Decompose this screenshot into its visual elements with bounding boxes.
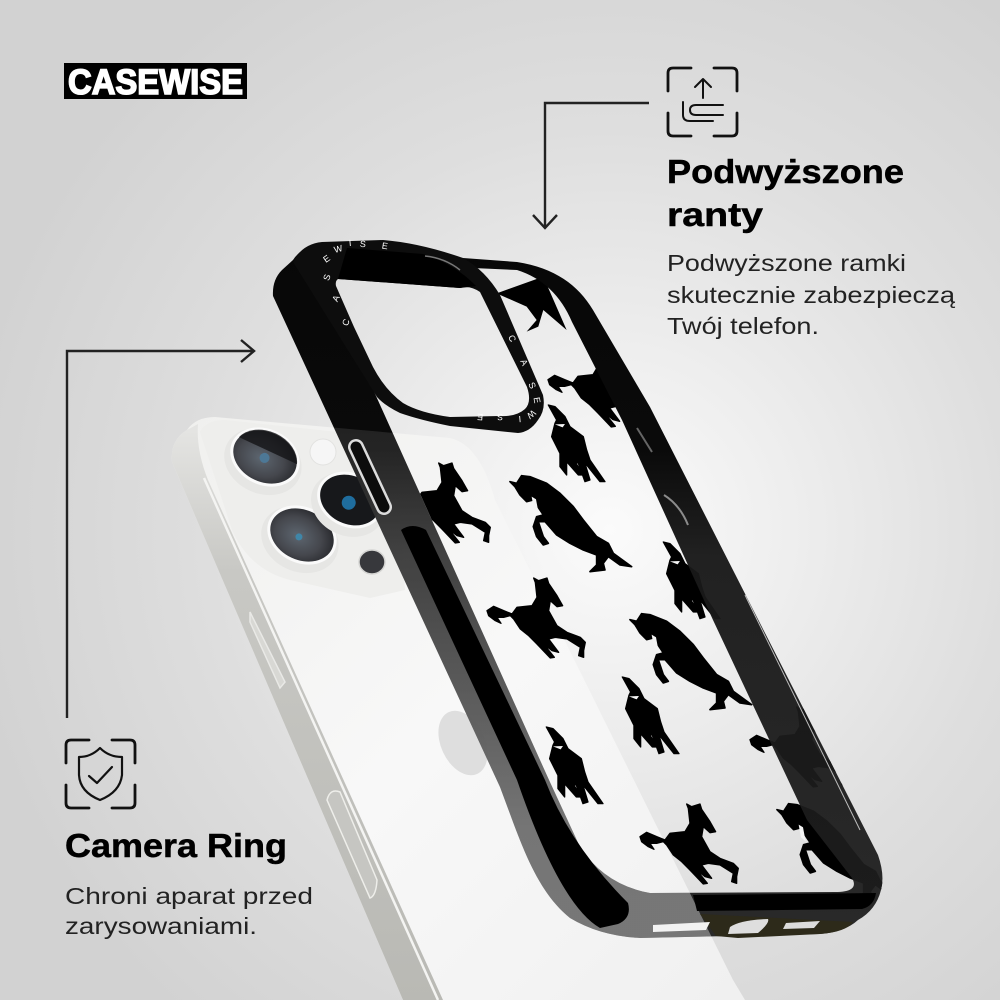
bottom port panel (700, 914, 853, 938)
right edge highlight (745, 595, 860, 830)
icon: shield (66, 740, 135, 808)
ring lettering: W (333, 243, 344, 255)
right side button ring (664, 495, 688, 525)
ring lettering: W (525, 408, 538, 421)
horse running 5 (750, 707, 848, 787)
left side button (356, 447, 384, 507)
heading: raised edges: ranty (667, 196, 764, 233)
camera ring (293, 238, 544, 433)
speaker port right (783, 921, 820, 929)
bottom black stripe (693, 893, 876, 911)
ring lettering: E (381, 241, 389, 251)
ring lettering: S (526, 381, 538, 390)
main lens (213, 415, 313, 507)
lower lens (250, 493, 350, 585)
heading: raised edges: Podwyższone (667, 153, 904, 190)
ring lettering: E (477, 412, 484, 422)
ring lettering: E (532, 396, 542, 404)
case frame (273, 244, 882, 938)
description: camera ring: zarysowaniami. (65, 913, 257, 939)
horse running 1 (640, 804, 738, 884)
ring lettering: A (518, 358, 530, 367)
ring lettering: I (348, 238, 352, 248)
apple logo (429, 703, 497, 783)
icon: raised edges (668, 68, 737, 136)
description: camera ring (65, 883, 313, 939)
right lens (300, 459, 396, 549)
heading: camera ring: Camera Ring (65, 827, 287, 864)
heading: raised edges (667, 153, 904, 233)
horse standing 2 (622, 677, 679, 754)
arrow: camera callout (67, 340, 254, 718)
clear phone case (273, 244, 882, 938)
horse standing 1 (548, 405, 605, 482)
horse rearing 2 (630, 614, 752, 710)
horse running 3 (420, 462, 491, 544)
sensor (359, 550, 385, 574)
flash (310, 439, 336, 465)
charging port (728, 919, 768, 934)
white phone (172, 415, 745, 1000)
logo: CASEWISE (68, 63, 243, 102)
horse rearing 1 (510, 476, 632, 572)
horse standing 3 (546, 727, 603, 804)
phone body (172, 417, 745, 1000)
side highlight (204, 478, 438, 1000)
horse running 4 (547, 368, 620, 428)
ring lettering: S (321, 273, 333, 282)
description: raised edges: skutecznie zabezpieczą (667, 282, 955, 308)
description: raised edges (667, 250, 955, 339)
upper side button (250, 612, 285, 688)
description: raised edges: Twój telefon. (667, 313, 819, 339)
phone side strip (172, 424, 443, 1000)
arrow: top callout (533, 103, 649, 228)
ring lettering: A (330, 294, 342, 303)
horse standing 4 (663, 542, 720, 619)
ring lettering: C (506, 333, 518, 344)
ring lettering (321, 238, 542, 424)
horse rearing 3 (776, 802, 882, 893)
description: camera ring: Chroni aparat przed (65, 883, 313, 909)
case over phone tint (334, 428, 712, 938)
description: raised edges: Podwyższone ramki (667, 250, 906, 276)
ring highlight (425, 256, 460, 270)
ring lettering: I (518, 414, 522, 424)
horse running 2 (487, 578, 585, 658)
speaker port left (653, 922, 710, 932)
ring lettering: S (497, 412, 503, 422)
horse top clipped (497, 277, 567, 332)
lower side button (327, 791, 377, 898)
ring lettering: E (321, 253, 332, 265)
left black stripe (401, 526, 629, 928)
ring inner wall (338, 248, 476, 288)
ring lettering: C (340, 317, 352, 327)
horse pattern (392, 277, 899, 900)
right side slot highlight (637, 428, 652, 452)
camera plateau (200, 420, 405, 598)
ring lettering: S (359, 239, 366, 249)
